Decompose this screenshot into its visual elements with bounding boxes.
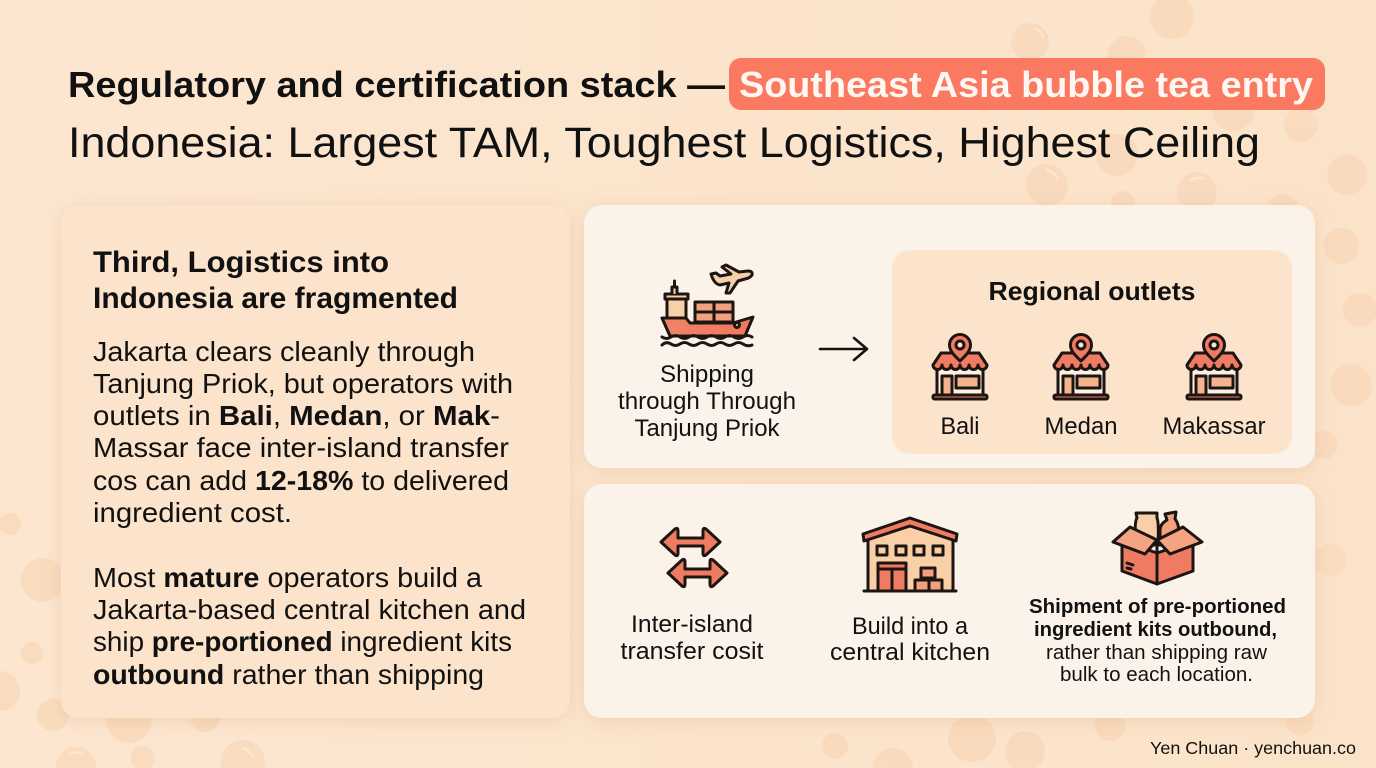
sub-panel: regional outlets — [892, 250, 1292, 454]
heading: first line: Regulatory and certification stack — — [68, 64, 725, 105]
paragraph two: Jakarta-based central kitchen and — [93, 594, 526, 625]
label: transfer cost: Inter-island — [631, 611, 753, 638]
outlet: Makassar — [1162, 334, 1266, 440]
label: transfer cost: transfer cosit — [620, 638, 764, 665]
label: kits shipment — [1029, 596, 1286, 686]
title — [68, 58, 1325, 167]
label: central kitchen — [830, 613, 990, 666]
icon: open box of kits — [1113, 512, 1202, 584]
label: central kitchen: Build into a — [852, 613, 969, 640]
label: shipping: Tanjung Priok — [634, 415, 780, 442]
paragraph two: Most mature operators build a — [93, 562, 482, 593]
label: transfer cost — [620, 611, 764, 665]
label: kits shipment: rather than shipping raw — [1046, 642, 1268, 664]
label: kits shipment: ingredient kits outbound, — [1034, 619, 1277, 641]
label: central kitchen: central kitchen — [830, 639, 990, 666]
outlet: Medan — [1044, 334, 1118, 440]
paragraph one: cos can add 12-18% to delivered — [93, 465, 509, 496]
paragraph one: Jakarta clears cleanly through — [93, 336, 475, 367]
paragraph two — [93, 562, 526, 690]
highlight pill: Southeast Asia bubble tea entry — [739, 64, 1313, 105]
label: shipping: through Through — [618, 388, 796, 415]
bubble highlights — [70, 29, 1203, 756]
label: shipping: Shipping — [660, 361, 754, 388]
footer credit: Yen Chuan · yenchuan.co — [1150, 738, 1356, 758]
panel heading: Indonesia are fragmented — [93, 282, 458, 315]
panel: logistics narrative — [61, 205, 570, 718]
icon: ship and plane — [662, 265, 753, 346]
paragraph one: ingredient cost. — [93, 497, 292, 528]
label: shipping — [618, 361, 796, 442]
icon: warehouse — [863, 518, 957, 591]
outlet: Medan: Medan — [1044, 413, 1118, 440]
panel heading — [93, 246, 458, 315]
panel: cost and kitchen strategy — [584, 484, 1315, 718]
icon: two-way arrows — [661, 528, 727, 587]
outlet: Bali: Bali — [940, 413, 980, 440]
outlet: Bali — [933, 334, 987, 440]
label: kits shipment: Shipment of pre-portioned — [1029, 596, 1286, 618]
outlet: Makassar: Makassar — [1162, 413, 1266, 440]
label: kits shipment: bulk to each location. — [1060, 664, 1253, 686]
panel heading: Third, Logistics into — [93, 246, 389, 279]
panel: shipping to regional outlets — [584, 205, 1315, 468]
paragraph two: ship pre-portioned ingredient kits — [93, 626, 512, 657]
paragraph one: Massar face inter-island transfer — [93, 432, 509, 463]
sub-panel heading: Regional outlets — [988, 276, 1196, 306]
paragraph two: outbound rather than shipping — [93, 659, 484, 690]
arrow — [820, 338, 867, 360]
paragraph one: Tanjung Priok, but operators with — [93, 368, 513, 399]
subtitle: Indonesia: Largest TAM, Toughest Logistics, Highest Ceiling — [68, 119, 1260, 167]
paragraph one: outlets in Bali, Medan, or Mak- — [93, 400, 500, 431]
paragraph one — [93, 336, 513, 528]
